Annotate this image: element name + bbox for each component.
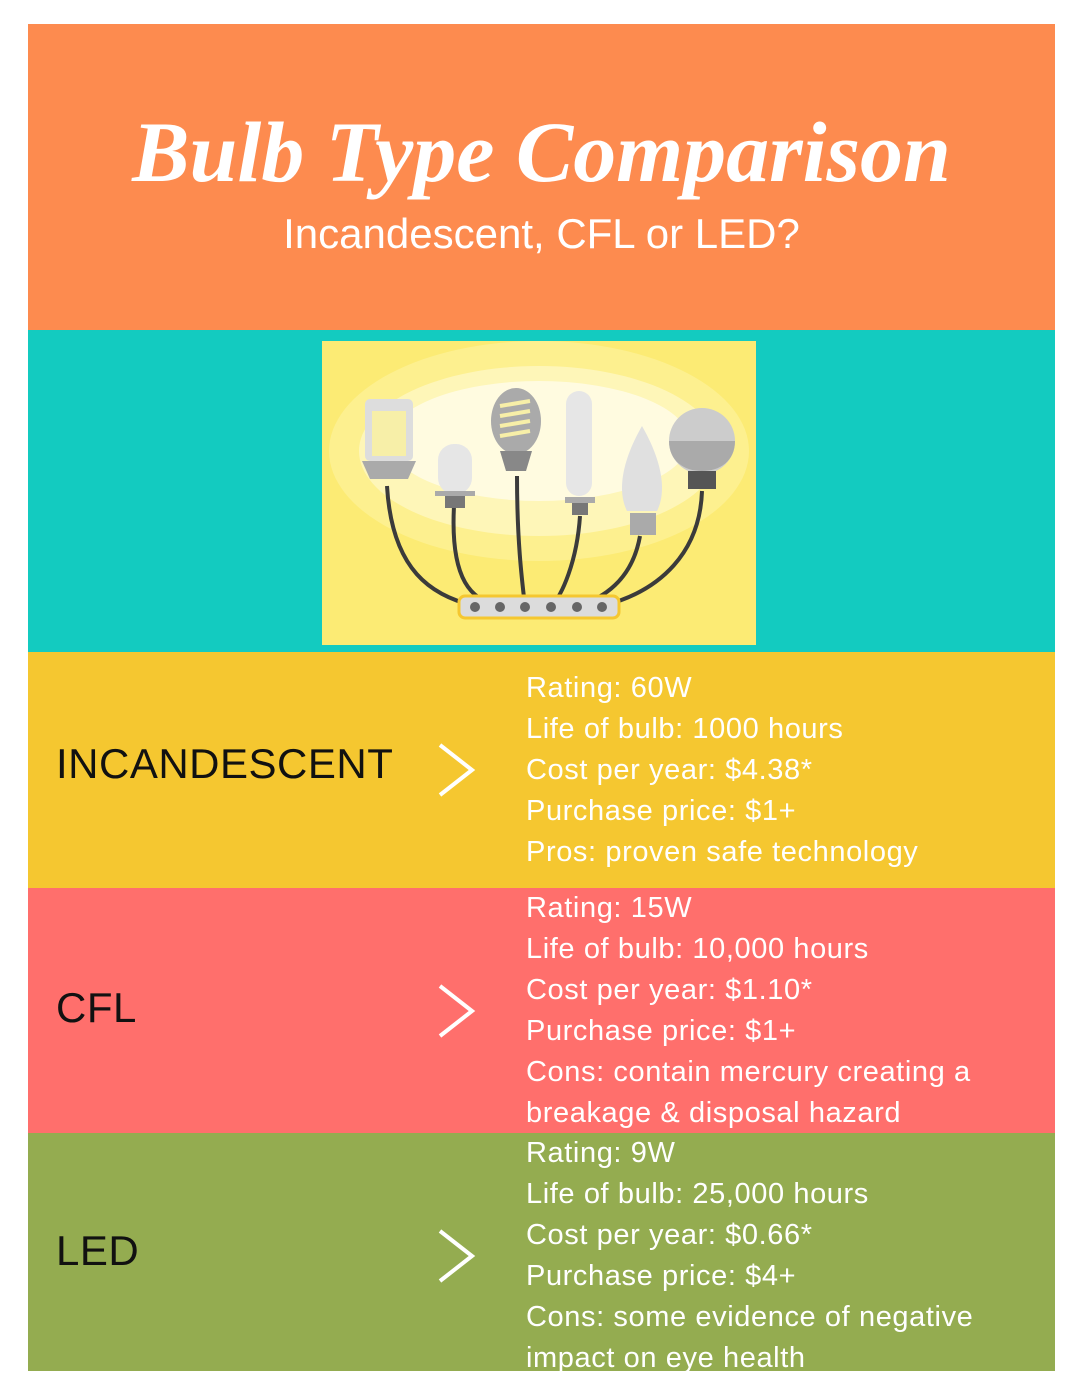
details — [526, 1137, 973, 1374]
arrow — [438, 743, 476, 797]
title: Bulb Type Comparison — [132, 104, 951, 200]
details: Rating: 15W — [526, 892, 692, 924]
details: Purchase price: $1+ — [526, 795, 796, 827]
details: Cost per year: $0.66* — [526, 1219, 813, 1251]
illustration: bulbs — [322, 341, 756, 645]
arrow — [438, 1229, 476, 1283]
details — [526, 672, 918, 868]
details: Purchase price: $1+ — [526, 1015, 796, 1047]
details: Cost per year: $4.38* — [526, 754, 813, 786]
details: Life of bulb: 25,000 hours — [526, 1178, 869, 1210]
details: Rating: 60W — [526, 672, 692, 704]
arrow — [438, 984, 476, 1038]
panel: image — [28, 330, 1055, 652]
panel: incandescent — [28, 652, 1055, 888]
details: Cost per year: $1.10* — [526, 974, 813, 1006]
label: CFL — [56, 984, 137, 1031]
details: Life of bulb: 10,000 hours — [526, 933, 869, 965]
subtitle: Incandescent, CFL or LED? — [283, 210, 800, 257]
details: Purchase price: $4+ — [526, 1260, 796, 1292]
details: Cons: some evidence of negative — [526, 1301, 973, 1333]
panel: CFL — [28, 888, 1055, 1133]
details — [526, 892, 971, 1129]
details: impact on eye health — [526, 1342, 806, 1374]
details: Pros: proven safe technology — [526, 836, 918, 868]
panel: LED — [28, 1133, 1055, 1371]
details: Rating: 9W — [526, 1137, 675, 1169]
label: LED — [56, 1227, 139, 1274]
details: breakage & disposal hazard — [526, 1097, 901, 1129]
panel: header — [28, 24, 1055, 330]
details: Life of bulb: 1000 hours — [526, 713, 844, 745]
label: INCANDESCENT — [56, 740, 393, 787]
details: Cons: contain mercury creating a — [526, 1056, 971, 1088]
